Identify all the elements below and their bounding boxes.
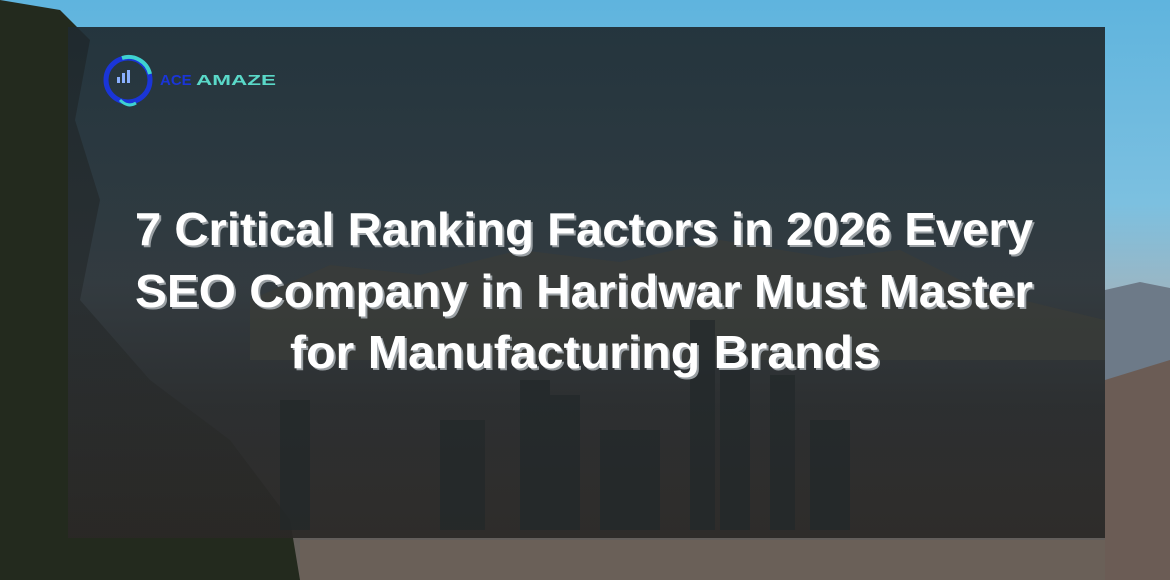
title: SEO Company in Haridwar Must Master bbox=[135, 265, 1033, 317]
city skyline bbox=[280, 320, 850, 530]
logo: ACE bbox=[160, 72, 192, 89]
title: 7 Critical Ranking Factors in 2026 Every bbox=[135, 203, 1033, 255]
title bbox=[135, 203, 1035, 380]
title: SEO Company in Haridwar Must Master bbox=[137, 267, 1035, 319]
logo: AMAZE bbox=[196, 72, 276, 89]
title: 7 Critical Ranking Factors in 2026 Every bbox=[137, 205, 1035, 257]
mountains bbox=[250, 240, 1105, 360]
dark overlay panel bbox=[68, 27, 1105, 538]
title: for Manufacturing Brands bbox=[290, 326, 880, 378]
logo bbox=[106, 57, 276, 105]
title: for Manufacturing Brands bbox=[292, 328, 882, 380]
